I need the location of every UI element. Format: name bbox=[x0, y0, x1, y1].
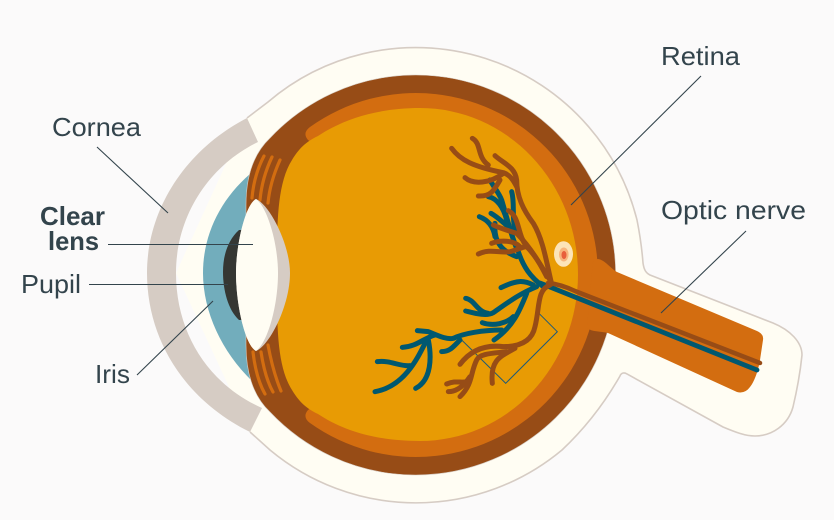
macula bbox=[554, 241, 573, 267]
brown vessels bbox=[447, 138, 552, 397]
label: Clear lens: lens bbox=[48, 226, 99, 256]
cornea bbox=[147, 118, 262, 432]
blue vessels bbox=[375, 180, 543, 392]
label: Cornea: Cornea bbox=[52, 112, 142, 142]
label: Clear lens bbox=[40, 201, 253, 256]
ciliary muscle stripes bbox=[252, 156, 281, 394]
retina orange layer bbox=[305, 93, 598, 457]
label: Optic nerve: Optic nerve bbox=[661, 195, 806, 225]
label: Retina: Retina bbox=[661, 41, 741, 71]
label: Optic nerve bbox=[661, 195, 806, 313]
label: Iris: Iris bbox=[95, 359, 130, 389]
label: Cornea bbox=[52, 112, 168, 213]
optic nerve blue vessel bbox=[540, 283, 757, 370]
inner eye yellow bbox=[277, 108, 578, 441]
sclera outer shell bbox=[176, 48, 802, 503]
optic nerve bbox=[587, 259, 763, 392]
pupil bbox=[223, 230, 250, 320]
iris bbox=[203, 174, 270, 381]
clear lens bbox=[236, 199, 290, 351]
label: Retina bbox=[571, 41, 741, 205]
detail frame bbox=[462, 313, 557, 383]
optic nerve brown vessel bbox=[548, 283, 760, 363]
eyeball choroid bbox=[246, 75, 616, 475]
label: Pupil: Pupil bbox=[21, 269, 81, 299]
label: Clear lens: Clear bbox=[40, 201, 105, 231]
label: Iris bbox=[95, 301, 213, 389]
